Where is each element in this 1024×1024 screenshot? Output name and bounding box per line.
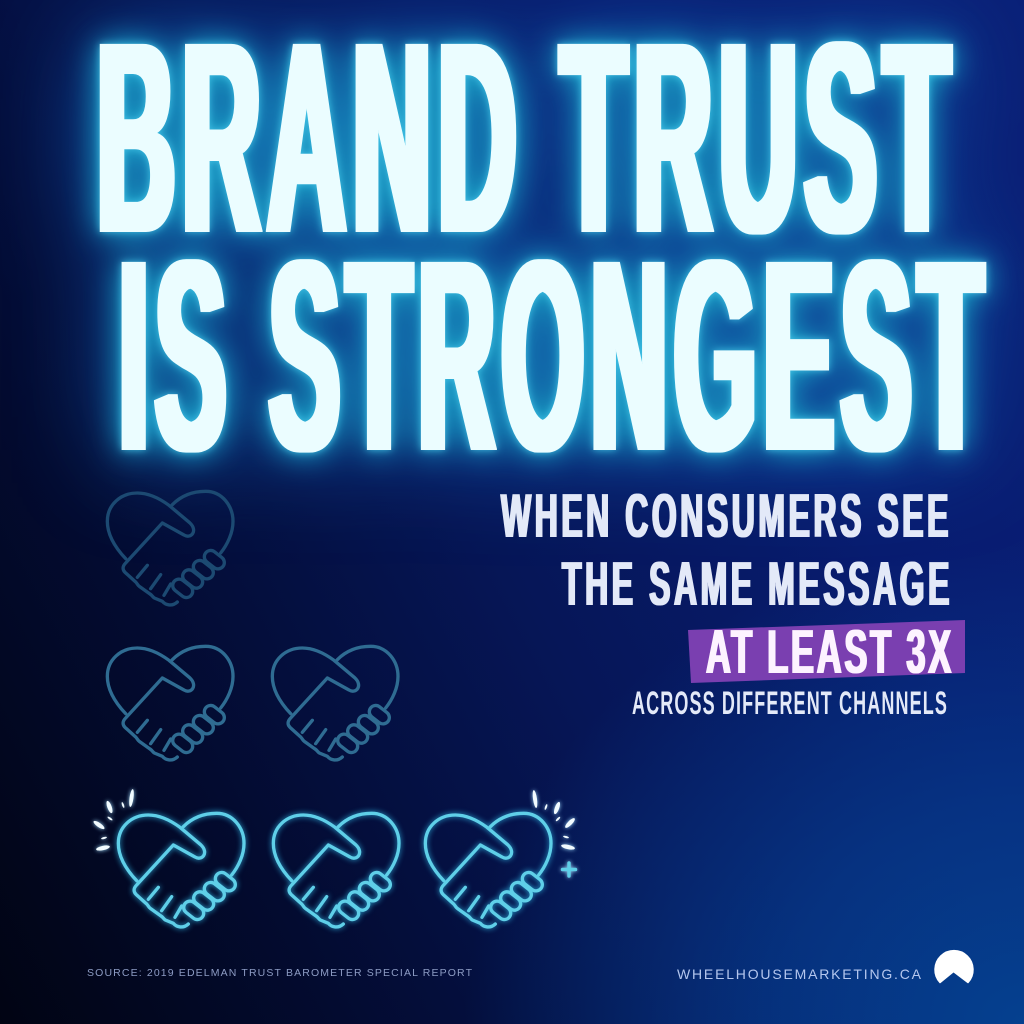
icon: handshake heart row 3 middle — [273, 813, 399, 927]
icon: handshake heart row 2 left — [107, 646, 233, 760]
icon: handshake heart row 1 — [107, 491, 233, 605]
website url: WHEELHOUSEMARKETING.CA — [677, 966, 922, 982]
title — [97, 0, 990, 508]
icon: sparkles right and plus — [532, 790, 576, 876]
source note: SOURCE: 2019 EDELMAN TRUST BAROMETER SPECIAL REPORT — [87, 967, 473, 979]
icon: logo — [935, 951, 973, 982]
icon: sparkles left — [92, 789, 135, 852]
icon: handshake heart row 2 right — [272, 646, 398, 760]
icon: handshake heart row 3 left — [118, 813, 244, 927]
subheading — [501, 482, 953, 619]
icon: handshake heart row 3 right — [425, 813, 551, 927]
